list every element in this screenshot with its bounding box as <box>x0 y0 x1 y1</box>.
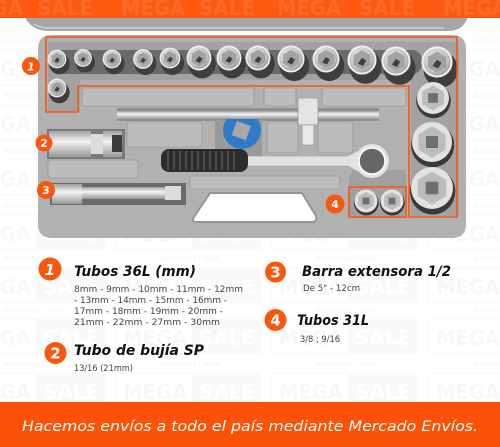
extension bar <box>50 183 186 205</box>
T handle <box>117 98 379 145</box>
tray recess: sockets row <box>48 42 459 216</box>
item 2: Tubo de bujía SP: 2 <box>50 344 61 362</box>
small socket well <box>349 170 406 216</box>
socket row <box>48 45 458 103</box>
item 1: Tubos 36L: 8mm - 9mm - 10mm - 11mm - 12mm <box>74 285 243 295</box>
item 4: Tubos 31L <box>264 309 369 345</box>
blue adapter <box>223 111 261 149</box>
tool channel <box>117 108 379 121</box>
item 1: Tubos 36L: 17mm - 18mm - 19mm - 20mm - <box>74 307 223 317</box>
item 4: Tubos 31L: 4 <box>270 312 281 330</box>
socket row shadow strip <box>50 50 422 74</box>
photo badge 4: 4 <box>331 198 339 211</box>
photo badge 4 <box>326 194 344 214</box>
photo badge 1 <box>22 57 40 75</box>
large sockets column <box>410 82 455 214</box>
item 3: Barra extensora: De 5" - 12cm <box>303 284 360 294</box>
case lid <box>24 16 468 31</box>
item 1: Tubos 36L: 21mm - 22mm - 27mm - 30mm <box>74 318 220 328</box>
item 4: Tubos 31L: 3/8 ; 9/16 <box>300 335 340 345</box>
photo badge 3 <box>37 181 55 199</box>
spark plug socket <box>47 129 125 159</box>
item 3: Barra extensora <box>265 262 451 294</box>
item 2: Tubo de bujía SP <box>44 342 205 374</box>
adapter pad <box>215 120 262 165</box>
handle cutout <box>193 193 316 222</box>
item 4: Tubos 31L: Tubos 31L <box>297 313 369 329</box>
item 2: Tubo de bujía SP: Tubo de bujía SP <box>74 343 205 359</box>
item 3: Barra extensora: Barra extensora 1/2 <box>302 264 451 280</box>
ratchet <box>161 144 389 178</box>
top orange band <box>0 0 500 20</box>
photo badge 1: 1 <box>27 60 35 74</box>
item 1: Tubos 36L: 1 <box>45 261 55 279</box>
item 1: Tubos 36L: - 13mm - 14mm - 15mm - 16mm - <box>74 296 227 306</box>
item 1: Tubos 36L: Tubos 36L (mm) <box>74 264 196 280</box>
item 3: Barra extensora: 3 <box>270 264 281 282</box>
tray moulded islands <box>48 88 406 189</box>
highlight: tubos 31L <box>349 187 406 217</box>
footer banner <box>0 402 500 447</box>
item 2: Tubo de bujía SP: 13/16 (21mm) <box>74 364 133 374</box>
photo badge 2: 2 <box>40 137 48 150</box>
photo badge 2 <box>36 134 52 152</box>
photo badge 3: 3 <box>42 184 50 197</box>
small sockets <box>354 190 405 215</box>
toolbox tray <box>38 35 466 238</box>
highlight: tubos 36L <box>46 37 457 217</box>
footer banner: Hacemos envíos a todo el país mediante Mercado Envíos. <box>22 419 478 435</box>
item 1: Tubos 36L <box>38 258 243 328</box>
